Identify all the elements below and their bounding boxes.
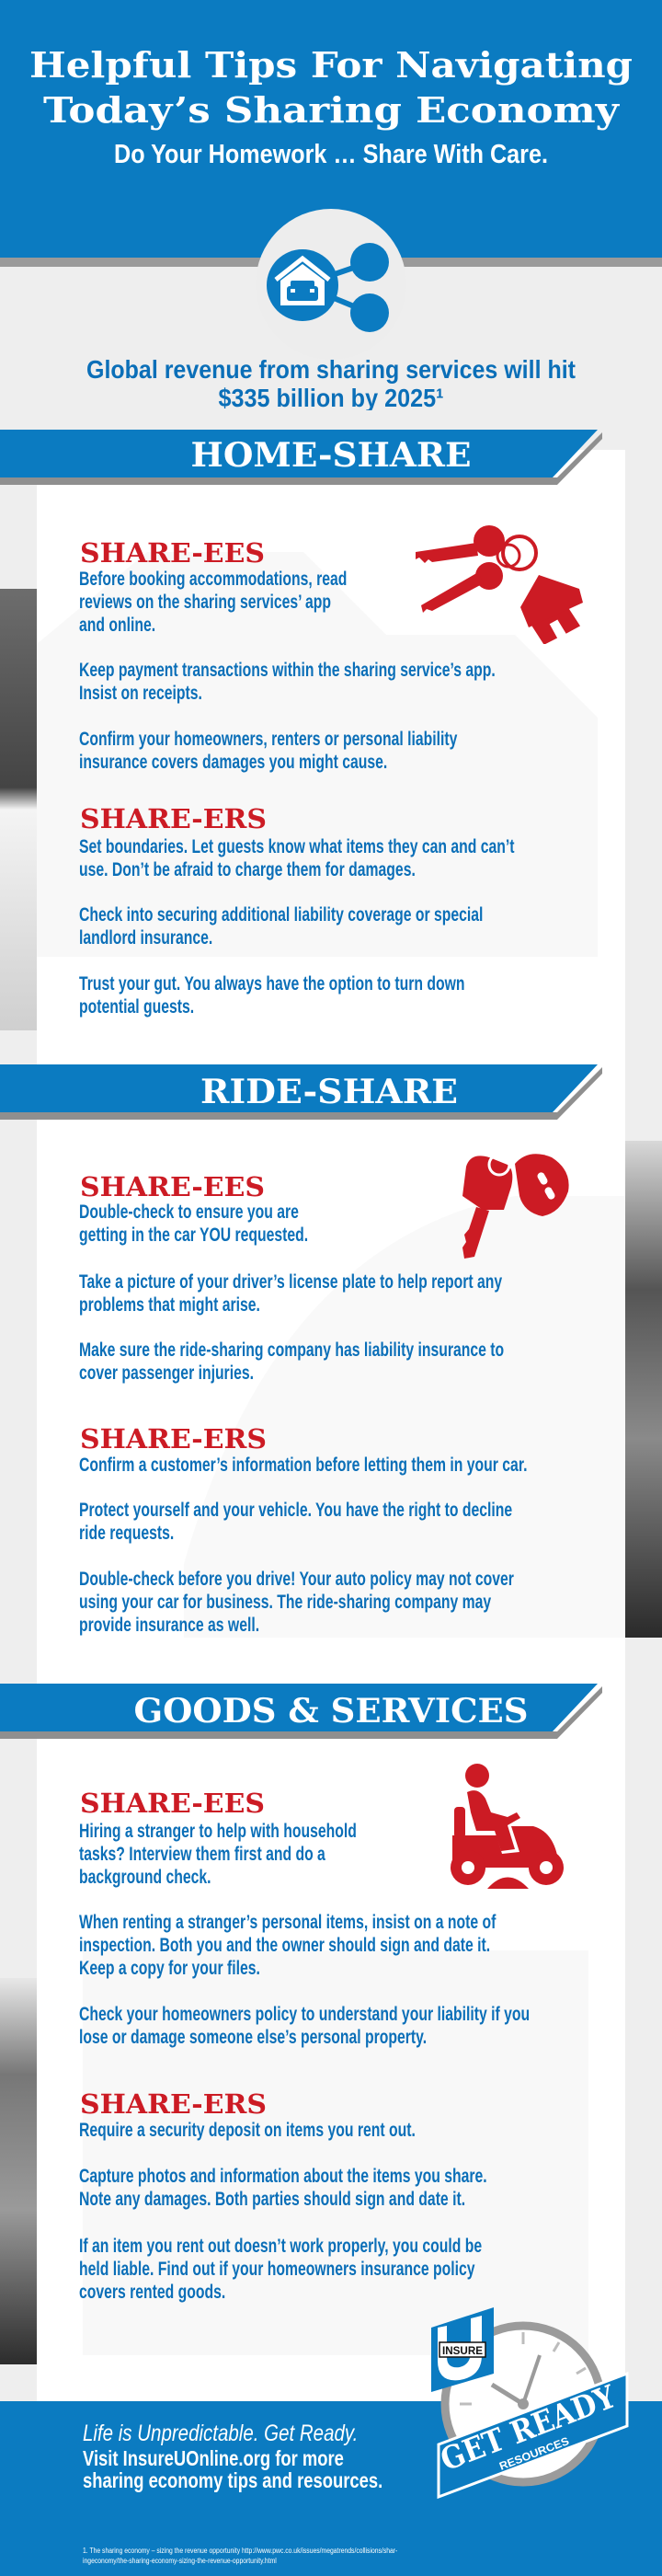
logo: Insure U Get Ready Resources badge bbox=[431, 2307, 629, 2499]
logo: Insure U Get Ready Resources badge: INSURE bbox=[442, 2344, 483, 2357]
text: insurance covers damages you might cause. bbox=[79, 752, 387, 773]
subtitle: Do Your Homework … Share With Care. bbox=[114, 140, 548, 169]
text: ride requests. bbox=[79, 1523, 174, 1544]
text: Set boundaries. Let guests know what items they can and can’t bbox=[79, 836, 514, 857]
text: Insist on receipts. bbox=[79, 683, 202, 704]
banner: GOODS & SERVICES bbox=[0, 1684, 602, 1739]
text: provide insurance as well. bbox=[79, 1615, 259, 1636]
footnote: 1. The sharing economy – sizing the revenue opportunity http://www.pwc.co.uk/issues/megatrends/collisions/shar- bbox=[83, 2547, 397, 2555]
text: Trust your gut. You always have the option to turn down bbox=[79, 973, 464, 995]
icon: red keys with house tag bbox=[416, 525, 583, 644]
ribbon bbox=[439, 2374, 627, 2497]
text: using your car for business. The ride-sharing company may bbox=[79, 1592, 491, 1613]
text: lose or damage someone else’s personal property. bbox=[79, 2027, 427, 2048]
footer call to action: Life is Unpredictable. Get Ready. bbox=[83, 2421, 358, 2446]
text: problems that might arise. bbox=[79, 1294, 260, 1316]
logo: Insure U Get Ready Resources badge: RESOURCES bbox=[497, 2434, 571, 2473]
text: Keep a copy for your files. bbox=[79, 1958, 260, 1979]
text: covers rented goods. bbox=[79, 2282, 225, 2303]
text: Check your homeowners policy to understand your liability if you bbox=[79, 2004, 530, 2025]
revenue statistic bbox=[86, 355, 576, 410]
text: cover passenger injuries. bbox=[79, 1363, 254, 1384]
text: Double-check to ensure you are bbox=[79, 1202, 299, 1223]
icon: house with car sharing bbox=[257, 209, 405, 332]
footer call to action: Visit InsureUOnline.org for more bbox=[83, 2446, 344, 2470]
text: Protect yourself and your vehicle. You have the right to decline bbox=[79, 1500, 512, 1521]
text: getting in the car YOU requested. bbox=[79, 1225, 308, 1246]
icon: red car keys bbox=[462, 1154, 569, 1259]
text: background check. bbox=[79, 1867, 211, 1888]
text: potential guests. bbox=[79, 996, 194, 1018]
text: Confirm a customer’s information before letting them in your car. bbox=[79, 1455, 527, 1476]
text: Make sure the ride-sharing company has liability insurance to bbox=[79, 1340, 504, 1361]
title: Today’s Sharing Economy bbox=[43, 89, 620, 131]
faint photos inside panel bbox=[37, 552, 598, 957]
text: Note any damages. Both parties should sign and date it. bbox=[79, 2189, 465, 2210]
text: landlord insurance. bbox=[79, 927, 212, 949]
footnote bbox=[83, 2547, 397, 2565]
white content panel bbox=[37, 450, 625, 2401]
title bbox=[29, 44, 633, 131]
text: Check into securing additional liability coverage or special bbox=[79, 904, 483, 926]
banner: HOME-SHARE bbox=[0, 430, 602, 485]
banner: HOME-SHARE: HOME-SHARE bbox=[191, 436, 471, 475]
text: held liable. Find out if your homeowners insurance policy bbox=[79, 2259, 475, 2280]
text: Keep payment transactions within the sharing service’s app. bbox=[79, 660, 496, 681]
text: Hiring a stranger to help with household bbox=[79, 1821, 357, 1842]
text: Before booking accommodations, read bbox=[79, 569, 347, 590]
text: Confirm your homeowners, renters or personal liability bbox=[79, 729, 457, 750]
text: Double-check before you drive! Your auto policy may not cover bbox=[79, 1569, 514, 1590]
footnote: ingeconomy/the-sharing-economy-sizing-the-revenue-opportunity.html bbox=[83, 2557, 277, 2565]
banner: GOODS & SERVICES: GOODS & SERVICES bbox=[134, 1692, 528, 1731]
clock bbox=[445, 2326, 601, 2482]
footer call to action: sharing economy tips and resources. bbox=[83, 2468, 382, 2492]
text: Take a picture of your driver’s license plate to help report any bbox=[79, 1271, 502, 1293]
text: and online. bbox=[79, 615, 155, 636]
text: use. Don’t be afraid to charge them for damages. bbox=[79, 859, 416, 880]
insure flag bbox=[431, 2307, 494, 2392]
footer call to action bbox=[83, 2421, 382, 2492]
footer bbox=[0, 2401, 662, 2576]
title: Helpful Tips For Navigating bbox=[29, 44, 633, 86]
text: inspection. Both you and the owner should sign and date it. bbox=[79, 1935, 490, 1956]
text: If an item you rent out doesn’t work properly, you could be bbox=[79, 2236, 482, 2257]
banner: RIDE-SHARE: RIDE-SHARE bbox=[200, 1073, 458, 1111]
text: tasks? Interview them first and do a bbox=[79, 1844, 325, 1865]
text: reviews on the sharing services’ app bbox=[79, 592, 331, 613]
text: Capture photos and information about the items you share. bbox=[79, 2166, 487, 2187]
banner: RIDE-SHARE bbox=[0, 1064, 602, 1120]
header bbox=[0, 0, 662, 267]
text: Require a security deposit on items you rent out. bbox=[79, 2120, 416, 2141]
text: When renting a stranger’s personal items, insist on a note of bbox=[79, 1912, 496, 1933]
icon: riding lawn mower bbox=[451, 1764, 564, 1889]
